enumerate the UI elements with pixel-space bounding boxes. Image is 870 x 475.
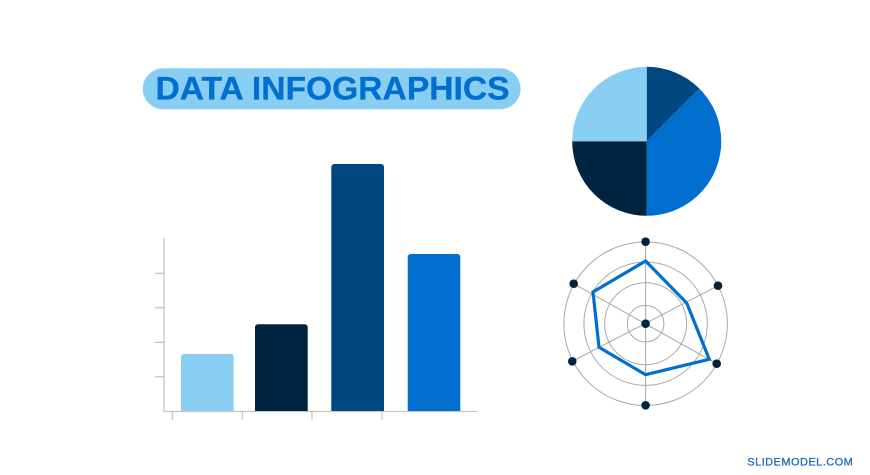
- footer brand: SLIDEMODEL.COM: [747, 457, 853, 469]
- title: DATA INFOGRAPHICS: [156, 70, 510, 106]
- chart axes: [155, 238, 478, 420]
- radar points: [568, 237, 722, 410]
- slice: blue: [647, 89, 721, 216]
- bar chart: [155, 164, 478, 420]
- bar: dark blue: [331, 164, 384, 411]
- radar chart: [564, 237, 727, 410]
- slice: navy: [572, 141, 647, 216]
- radar grid: [564, 242, 727, 406]
- bar: navy: [255, 324, 308, 411]
- bar: blue: [408, 254, 460, 411]
- radar data polygon: [593, 261, 709, 375]
- bar: light blue: [181, 354, 234, 411]
- pie chart: [572, 67, 721, 216]
- slice: dark blue: [647, 67, 699, 141]
- slice: light blue: [572, 67, 647, 141]
